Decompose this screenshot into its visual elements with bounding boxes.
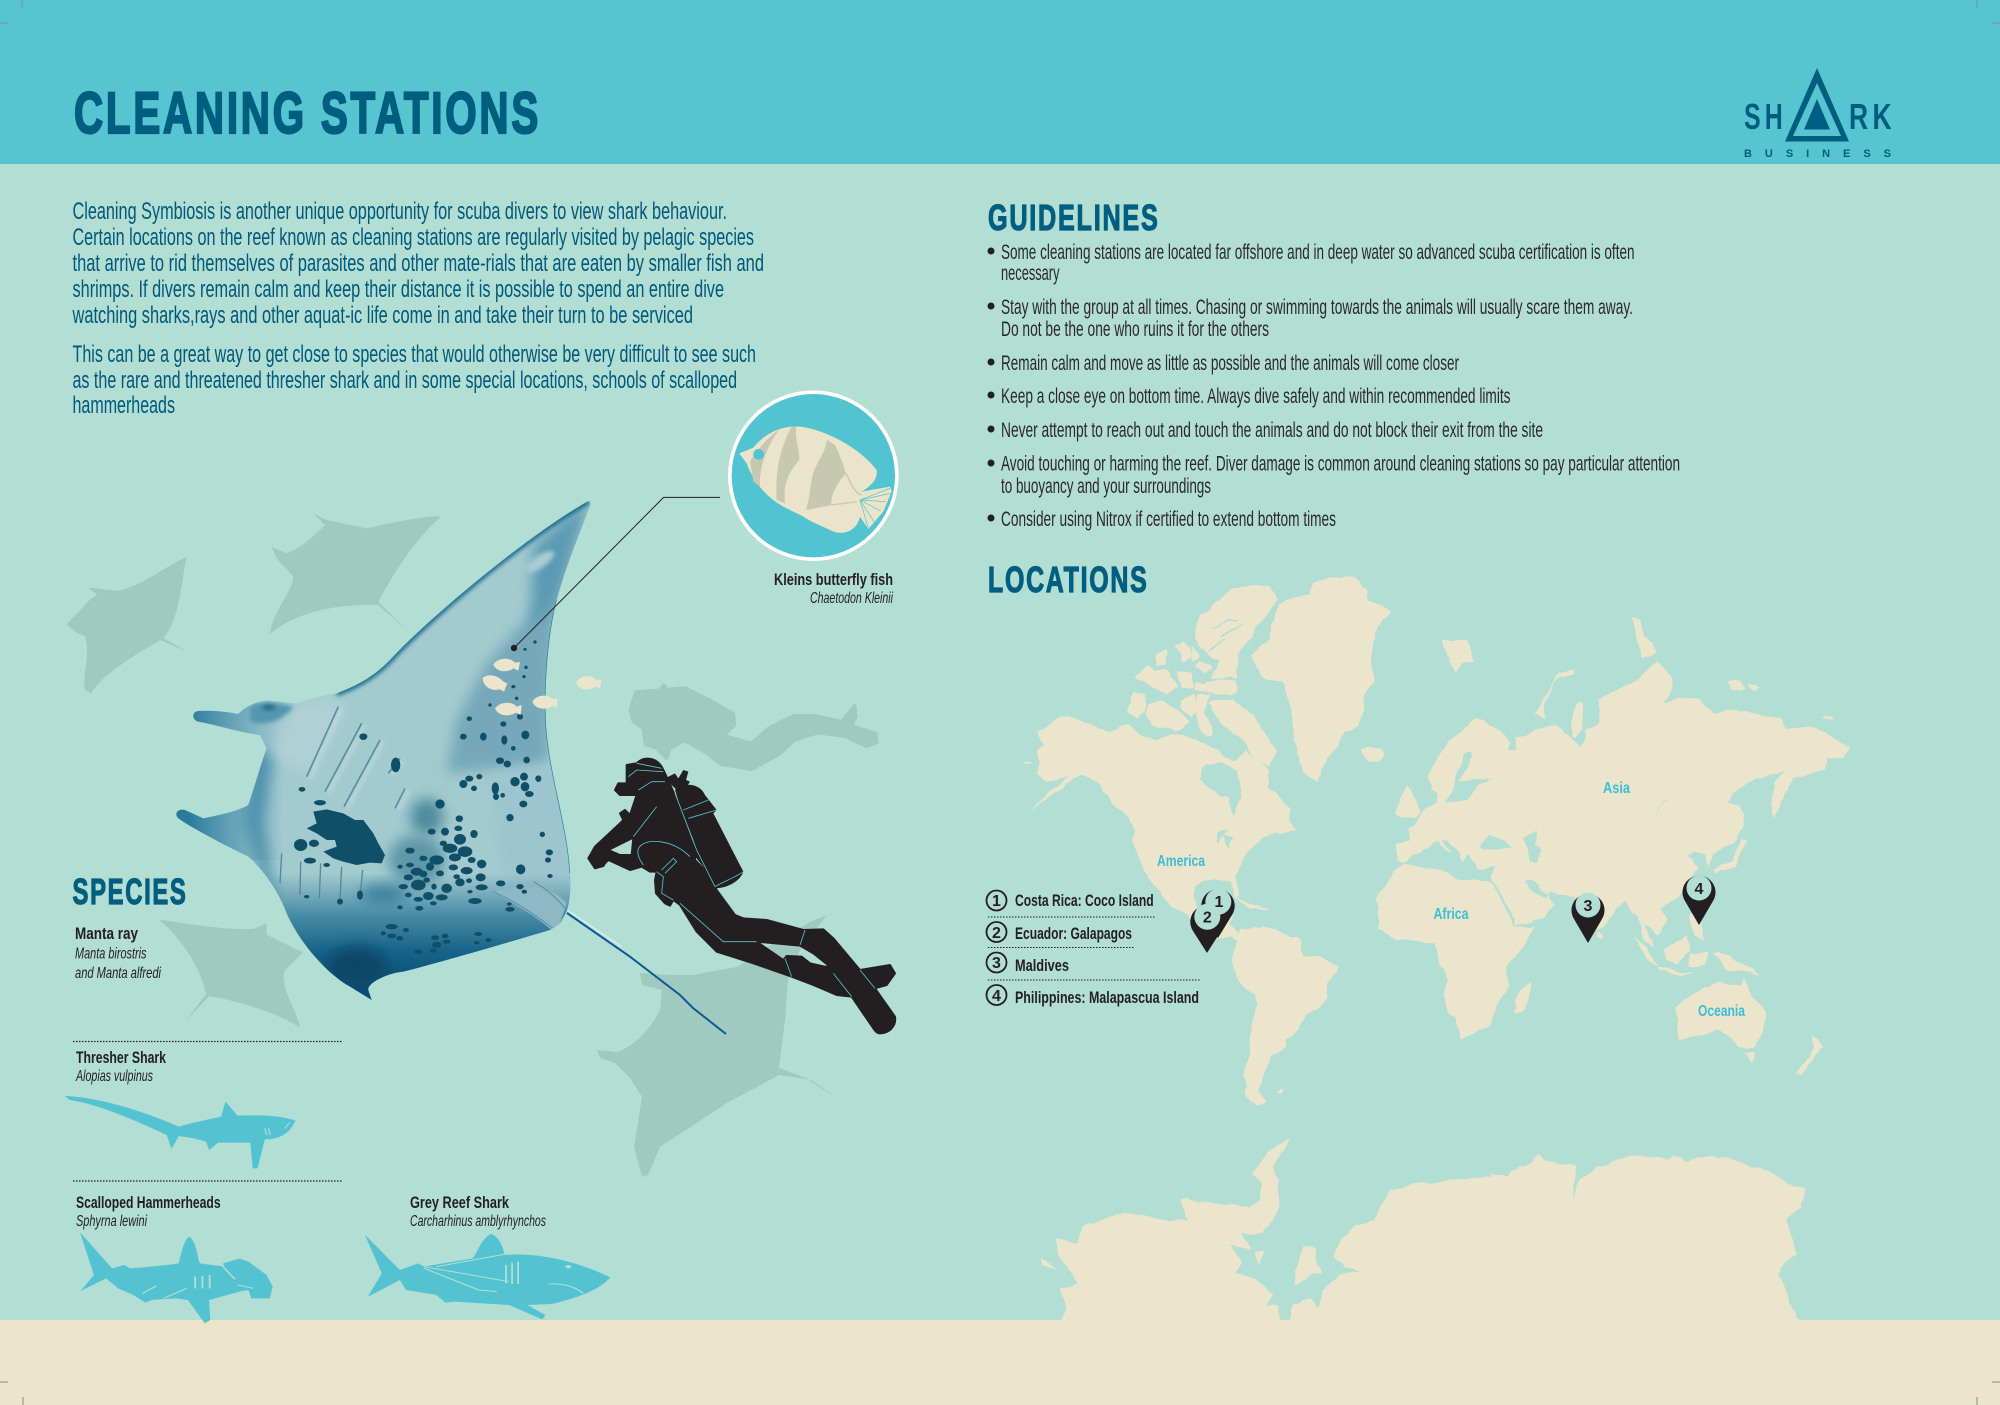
map: Greenland and Iceland (1252, 577, 1391, 782)
ghost manta: top centre (270, 513, 442, 634)
inset caption: Kleins butterfly fish: Kleins butterfly fish (774, 570, 893, 589)
continent labels: America (1157, 853, 1205, 870)
species: Grey Reef Shark: Carcharhinus amblyrhynchos (410, 1213, 546, 1230)
guidelines list: to buoyancy and your surroundings (1001, 475, 1211, 498)
intro text: hammerheads (72, 392, 175, 419)
guidelines list: Consider using Nitrox if certified to extend bottom times (1001, 508, 1336, 531)
location legend: 4 (992, 988, 1001, 1005)
header band (0, 0, 2000, 164)
intro text: watching sharks,rays and other aquat-ic life come in and take their turn to be serviced (72, 302, 693, 329)
title: CLEANING STATIONS (74, 81, 541, 146)
diver: valve (665, 770, 690, 790)
guidelines heading: GUIDELINES (988, 197, 1160, 238)
ghost manta: far left (67, 557, 188, 694)
guidelines list: Keep a close eye on bottom time. Always dive safely and within recommended limits (1001, 385, 1510, 408)
map pins (1190, 876, 1716, 953)
location legend: 1 (992, 893, 1001, 910)
diver: body and fins (588, 759, 895, 1033)
guidelines list: Stay with the group at all times. Chasing or swimming towards the animals will usually scare them away. (1001, 296, 1633, 319)
logo: Shark Business: BUSINESS (1744, 148, 1891, 160)
world map (1025, 577, 1850, 1333)
species: Grey Reef Shark: Grey Reef Shark (410, 1193, 509, 1212)
diver: suit outlines (628, 763, 875, 997)
continent labels: Africa (1434, 906, 1469, 923)
icon: thresher shark (65, 1096, 296, 1168)
pin 4: Malapascua: 4 (1695, 881, 1704, 898)
pins 1 and 2: Coco Island and Galapagos (1190, 889, 1235, 953)
guidelines list: necessary (1001, 262, 1060, 285)
species heading: SPECIES (72, 871, 188, 912)
pin 4: Malapascua (1682, 876, 1716, 925)
inset: Kleins butterfly fish (728, 390, 899, 561)
intro text: as the rare and threatened thresher shark and in some special locations, schools of scalloped (72, 367, 737, 394)
ghost manta: large bottom centre (597, 915, 836, 1177)
species dividers (73, 1042, 343, 1181)
intro text: shrimps. If divers remain calm and keep their distance it is possible to spend an entire dive (72, 276, 724, 303)
location legend: Maldives (1015, 956, 1069, 975)
species: Thresher Shark: Alopias vulpinus (75, 1068, 153, 1085)
guidelines list: Never attempt to reach out and touch the animals and do not block their exit from the site (1001, 419, 1543, 442)
species: Manta ray: Manta ray (75, 924, 138, 943)
species: Thresher Shark: Thresher Shark (76, 1048, 166, 1067)
continent labels (1157, 780, 1745, 1020)
species: Thresher Shark (65, 1048, 296, 1168)
map: Eurasia (1380, 616, 1850, 947)
species: Scalloped Hammerheads: Scalloped Hammerheads (76, 1193, 221, 1212)
pins 1 and 2: Coco Island and Galapagos: 1 (1215, 894, 1224, 911)
pin 3: Maldives (1572, 892, 1604, 943)
locations heading: LOCATIONS (988, 559, 1148, 600)
diver: tank (675, 785, 743, 888)
logo: Shark Business: SH (1744, 96, 1787, 137)
location legend: Costa Rica: Coco Island (1015, 891, 1154, 910)
scuba diver (588, 759, 895, 1033)
guidelines list: Remain calm and move as little as possible and the animals will come closer (1001, 352, 1459, 375)
species: Grey Reef Shark (365, 1193, 610, 1319)
species: Manta ray: and Manta alfredi (75, 965, 161, 982)
manta ray (170, 490, 603, 1007)
location legend: Ecuador: Galapagos (1015, 924, 1132, 943)
guidelines list: Do not be the one who ruins it for the others (1001, 318, 1269, 341)
intro text: This can be a great way to get close to species that would otherwise be very difficult to see such (72, 341, 756, 368)
species: Manta ray: Manta birostris (75, 946, 146, 962)
sand footer band (0, 1320, 2000, 1405)
map: Antarctica (1040, 1140, 1805, 1333)
intro text: that arrive to rid themselves of parasites and other mate-rials that are eaten by smaller fish and (72, 250, 764, 277)
intro text: Certain locations on the reef known as cleaning stations are regularly visited by pelagic species (72, 224, 754, 251)
guidelines list (988, 241, 1680, 531)
inset caption: Kleins butterfly fish (774, 570, 893, 607)
species: Manta ray (75, 924, 161, 982)
species: Scalloped Hammerheads: Sphyrna lewini (76, 1213, 147, 1230)
manta: gill slits (280, 707, 408, 902)
species: Scalloped Hammerheads (76, 1193, 273, 1323)
location legend (986, 890, 1201, 1007)
intro text (72, 198, 764, 419)
map: Southeast Asia and Oceania (1597, 910, 1823, 1073)
intro text: Cleaning Symbiosis is another unique opportunity for scuba divers to view shark behaviour. (72, 198, 727, 225)
guidelines list: Some cleaning stations are located far offshore and in deep water so advanced scuba certification is often (1001, 241, 1634, 264)
location legend: 3 (992, 955, 1001, 972)
continent labels: Oceania (1698, 1003, 1745, 1020)
cleaner fish (483, 659, 601, 715)
location legend: 2 (992, 925, 1001, 942)
manta: dark belly spots (294, 640, 553, 954)
location legend: Philippines: Malapascua Island (1015, 988, 1199, 1007)
manta ray tail (567, 910, 726, 1034)
ghost diver (630, 685, 877, 770)
pointer line from fish to inset (511, 497, 720, 651)
pins 1 and 2: Coco Island and Galapagos: 2 (1203, 910, 1212, 926)
icon: hammerhead shark (80, 1232, 273, 1323)
icon: grey reef shark (365, 1234, 610, 1319)
map: North America (1025, 587, 1296, 940)
map: South America (1232, 928, 1337, 1105)
map: Africa and Madagascar (1378, 865, 1533, 1037)
logo: Shark Business (1744, 68, 1896, 160)
inset caption: Kleins butterfly fish: Chaetodon Kleinii (810, 590, 893, 607)
continent labels: Asia (1603, 780, 1630, 797)
ghost manta rays and ghost diver (67, 513, 877, 1177)
logo: Shark Business: RK (1849, 96, 1896, 137)
ghost manta: under species heading (159, 920, 303, 1028)
pin 3: Maldives: 3 (1584, 898, 1593, 915)
